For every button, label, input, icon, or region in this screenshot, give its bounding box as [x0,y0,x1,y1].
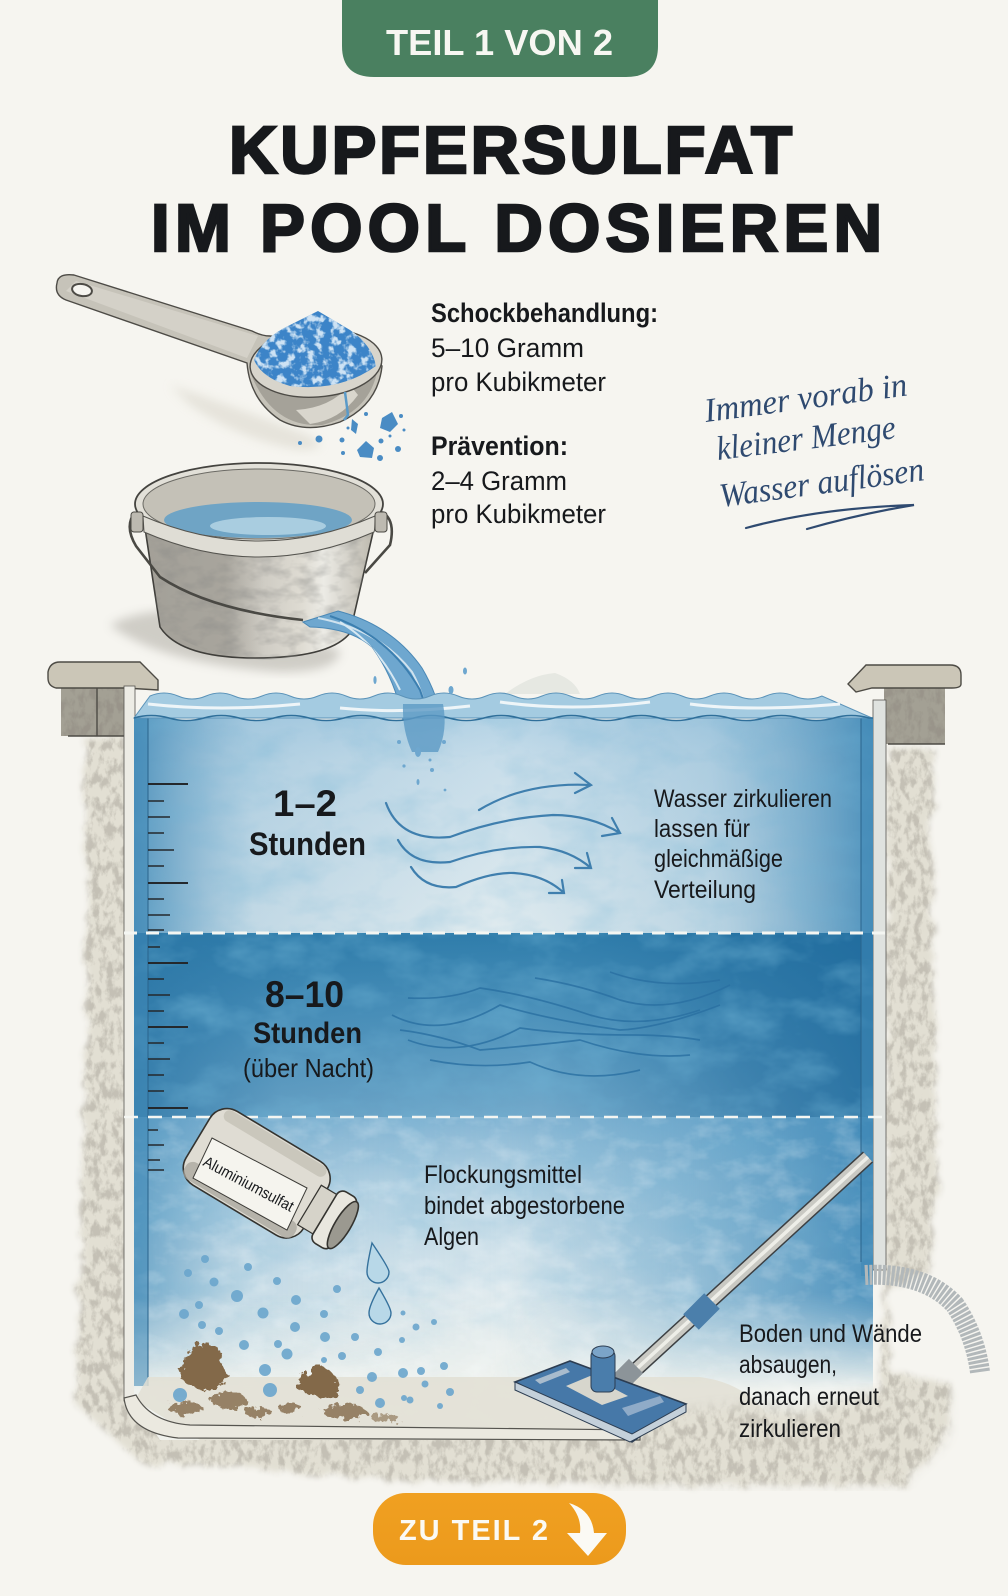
floor curb [124,1395,640,1440]
zone 2: dark water [134,933,873,1118]
next part button: ZU TEIL 2 [399,1515,548,1547]
flocculant bottle [176,1101,372,1266]
top badge: Teil 1 von 2 [342,0,658,77]
splash droplets [373,668,467,791]
bucket handle [130,512,392,620]
icon: metal bucket [130,463,392,665]
time label 8-10 Stunden [243,974,374,1083]
sediment of dead algae [167,1342,399,1422]
vacuum note [739,1320,922,1443]
handwritten note [701,367,926,529]
vacuum note: Boden und Wände [739,1320,922,1348]
time label 8-10 Stunden: 8–10 [265,974,344,1015]
next part button [373,1493,626,1565]
water drops from bottle [367,1243,391,1324]
water body with three time zones [134,690,873,1440]
right floor ground [604,1387,952,1489]
top badge: Teil 1 von 2: TEIL 1 VON 2 [386,22,613,63]
time label 1-2 Stunden: 1–2 [273,783,337,824]
flocculant note: Algen [424,1223,479,1251]
handwritten note: kleiner Menge [714,409,898,468]
time label 8-10 Stunden: Stunden [253,1017,362,1050]
dosage text: 2–4 Gramm [431,466,567,496]
falling crystals [298,412,406,461]
dosage text: pro Kubikmeter [431,367,606,397]
bottle label text: Aluminiumsulfat [200,1154,297,1216]
flocculant particles [173,1255,454,1409]
flocculant note: bindet abgestorbene [424,1192,625,1220]
zone 3: fading water [134,1117,873,1440]
pool floor [135,1377,780,1440]
dosage text: 5–10 Gramm [431,333,584,363]
vacuum hose [865,1275,980,1372]
zone 1: light water [134,718,873,933]
bottle label [193,1138,307,1230]
pool coping right [848,665,961,692]
title: KUPFERSULFAT [229,113,792,188]
icon: scoop with copper sulfate crystals [56,275,384,428]
water surface waves [134,693,873,720]
time label 1-2 Stunden: Stunden [249,826,366,862]
dosage text: Prävention: [431,431,568,461]
title: IM POOL DOSIEREN [151,191,882,266]
scoop shadow [170,385,320,450]
vacuum pole [618,1157,868,1384]
pool pillars [61,686,945,744]
dosage text: Schockbehandlung: [431,298,658,328]
flocculant note [424,1161,625,1251]
circulation note: gleichmäßige [654,845,783,873]
title [151,113,882,266]
dashed divider 1 [124,932,886,934]
vacuum note: absaugen, [739,1351,837,1379]
dashed divider 2 [124,1116,886,1118]
overnight current lines [392,972,730,1076]
icon: curved arrow [567,1503,607,1556]
pool liner walls [124,686,886,1401]
crystal mound [254,311,376,388]
circulation note [654,785,832,904]
pale spray behind waves [505,673,580,694]
stream falling through the surface [403,704,445,752]
dosage text: pro Kubikmeter [431,499,606,529]
circulation note: Wasser zirkulieren [654,785,832,813]
circulation note: lassen für [654,815,750,843]
time label 8-10 Stunden: (über Nacht) [243,1053,374,1083]
dosage text [431,298,658,529]
timeline ruler [148,784,188,1170]
handwritten note: Immer vorab in [701,367,909,430]
water stream pouring from bucket [303,611,443,725]
flocculant note: Flockungsmittel [424,1161,582,1189]
pool coping left [48,662,158,690]
handwritten note: Wasser auflösen [717,451,926,515]
vacuum head [515,1346,686,1442]
vacuum note: danach erneut [739,1383,879,1411]
time label 1-2 Stunden [249,783,366,862]
circulation arrows [386,773,620,893]
vacuum note: zirkulieren [739,1415,841,1443]
bucket shadow [110,610,340,672]
circulation note: Verteilung [654,876,756,904]
stone walls and ground [50,730,970,1510]
